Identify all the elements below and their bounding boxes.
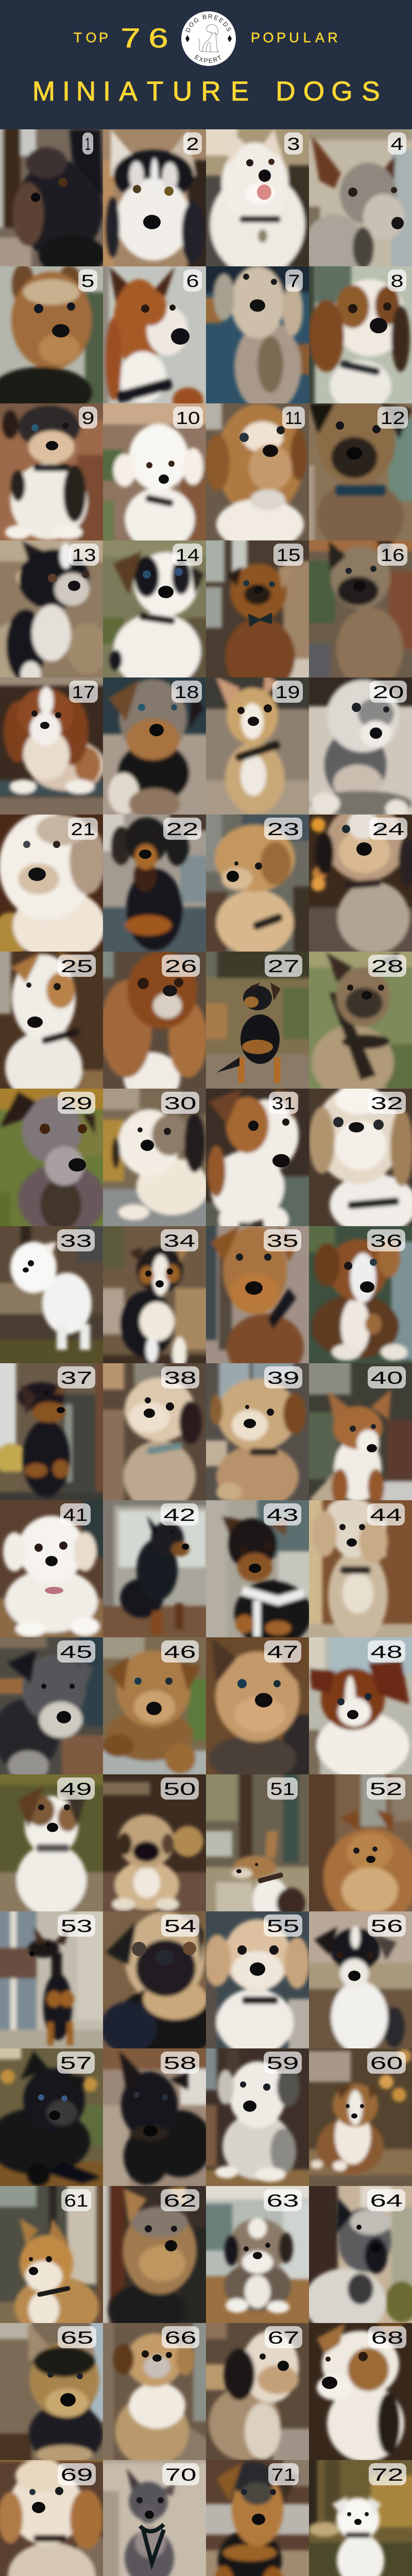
tile 26: long eared spaniel [103,952,206,1089]
badge 59: 59 [267,2054,299,2073]
tile 39: tan puppy window [201,1359,309,1509]
tile 12: border terrier [309,403,412,540]
badge 19: 19 [275,683,300,702]
badge 32: 32 [371,1094,403,1113]
badge 22 [163,818,201,840]
badge 18 [171,681,202,703]
tile 4: hairless terrier [309,129,412,266]
tile 3: white spitz [206,129,309,266]
badge 13: 13 [72,546,96,565]
badge 55: 55 [267,1917,300,1936]
badge 43 [264,1503,301,1526]
badge 48 [368,1640,405,1663]
tile 47: cairn terrier [206,1637,314,1782]
tile 63: shih tzu puppy [201,2181,315,2330]
tile 7: poodle mix [206,266,309,403]
tile 45: mini schnauzer [0,1633,108,1782]
tile 33: white spitz outdoors [0,1226,103,1363]
badge 32 [368,1092,406,1114]
tile 18: yorkie puppy [103,677,206,815]
tile 57: black fluffy pup [0,2044,109,2193]
badge 44 [367,1503,405,1526]
badge 4: 4 [390,134,404,154]
badge 33: 33 [60,1231,92,1251]
logo: dog breeds expert: DOG BREEDS [185,14,231,32]
badge 42: 42 [164,1505,196,1525]
badge 4 [388,132,406,155]
badge 64 [367,2189,405,2211]
tile 71: airedale puppy [201,2455,315,2576]
badge 44: 44 [370,1505,402,1525]
tile 1: black terrier [0,129,103,266]
badge 42 [161,1503,198,1526]
tile 68: jack russell [309,2323,412,2462]
badge 29 [58,1092,95,1114]
tile 31: jack russell [206,1089,309,1226]
heading: top: TOP [74,30,108,45]
badge 33 [57,1229,95,1251]
badge 26: 26 [165,957,197,976]
badge 66 [162,2326,199,2348]
badge 43: 43 [267,1505,299,1525]
badge 2 [183,132,202,155]
badge 29: 29 [61,1094,93,1113]
badge 71: 71 [271,2465,296,2485]
badge 59 [264,2052,302,2074]
tile 72: westie [304,2455,412,2576]
tile 38: cream puppy [98,1359,206,1513]
heading: 76: 76 [121,23,168,54]
badge 54 [161,1914,199,1937]
tile 24: terrier bokeh [309,815,412,952]
badge 56: 56 [371,1917,403,1936]
badge 45 [57,1640,95,1663]
badge 28 [368,955,406,977]
badge 36 [367,1229,405,1251]
badge 37: 37 [61,1368,93,1388]
badge 35: 35 [267,1231,299,1251]
badge 28: 28 [371,957,404,976]
badge 38: 38 [164,1368,197,1388]
badge 20: 20 [373,683,404,702]
badge 6 [183,269,202,292]
badge 65 [58,2326,96,2348]
tile 37: miniature pinscher [0,1359,109,1507]
tile 13: boston terrier [0,540,103,677]
tile 22: dachshund [103,815,206,952]
tile 46: tan puppy [98,1633,212,1782]
badge 9: 9 [81,409,95,428]
tile 41: white maltese [0,1496,109,1645]
tile 29: italian greyhound [0,1089,103,1226]
badge 12: 12 [380,409,405,428]
badge 34: 34 [164,1231,196,1251]
tile 17: cavalier [0,677,103,815]
badge 13 [69,544,99,566]
badge 65: 65 [61,2328,94,2348]
badge 3: 3 [287,134,300,154]
tile 49: jack russell puppy [0,1770,109,1919]
tile 58: scottish terrier [98,2044,212,2193]
badge 60: 60 [370,2054,403,2073]
badge 2: 2 [186,134,199,154]
tile 6: red hound [103,266,206,403]
badge 40 [368,1366,406,1388]
tile 25: fox terrier [0,952,103,1089]
badge 17 [69,681,98,703]
badge 31 [269,1092,298,1114]
badge 14 [173,544,202,566]
badge 52 [367,1777,405,1800]
tile 48: papillon [304,1633,412,1782]
tile 5: terrier [0,266,103,403]
badge 67 [265,2326,302,2348]
badge 1 [82,132,93,155]
badge 25: 25 [61,957,93,976]
tile 14: spotted puppy [103,540,206,677]
badge 20 [370,681,407,703]
badge 39: 39 [267,1368,300,1388]
badge 12 [377,406,408,429]
badge 10: 10 [176,409,200,428]
tile 69: curly poodle [0,2455,109,2576]
tile 34: black white puppy [98,1222,212,1370]
badge 50: 50 [164,1780,196,1799]
tile 51: rat terrier [201,1770,315,1924]
badge 21 [68,818,98,840]
badge 41 [60,1503,91,1526]
tile 53: min pin on sill [0,1907,109,2056]
badge 24: 24 [372,820,405,839]
tile 65: shepherd puppy [0,2318,108,2465]
logo: dog breeds expert [181,11,236,66]
badge 23: 23 [267,820,300,839]
tile 42: miniature pinscher window [98,1496,212,1645]
badge 62 [161,2189,199,2211]
badge 56 [368,1914,406,1937]
badge 54: 54 [164,1917,197,1936]
badge 6: 6 [186,272,199,291]
tile 20: white gray terrier [309,677,412,815]
badge 25 [58,955,96,977]
badge 58: 58 [164,2054,197,2073]
tile 52: pomeranian [304,1770,412,1926]
badge 22: 22 [166,820,199,839]
badge 9 [79,406,97,429]
badge 70: 70 [165,2465,197,2485]
badge 62: 62 [164,2191,197,2211]
tile 9: tricolor puppy [0,403,103,540]
badge 68: 68 [371,2328,404,2348]
tile 59: white grey terrier [201,2044,315,2193]
badge 57 [57,2052,95,2074]
badge 61: 61 [64,2191,89,2211]
badge 31: 31 [272,1094,296,1113]
badge 47 [264,1640,301,1663]
tile 28: french bulldog [309,952,412,1089]
badge 15 [273,544,303,566]
badge 3 [284,132,303,155]
badge 49 [57,1777,95,1800]
badge 50 [161,1777,199,1800]
tile 64: skye terrier [304,2181,412,2335]
badge 66: 66 [165,2328,197,2348]
badge 51 [267,1777,298,1800]
tile 8: beagle [309,266,412,403]
badge 45: 45 [60,1642,93,1662]
badge 39 [264,1366,302,1388]
tile 21: white puppy [0,815,103,952]
tile 55: cream white puppy [201,1911,314,2056]
heading: popular: POPULAR [251,30,338,45]
badge 60 [367,2052,406,2074]
badge 27: 27 [268,957,300,976]
badge 18: 18 [174,683,199,702]
badge 57: 57 [60,2054,92,2073]
badge 70 [162,2463,199,2485]
badge 36: 36 [370,1231,403,1251]
tile 44: toy poodle [304,1496,412,1645]
tile 2: husky [103,129,206,266]
badge 5 [78,269,97,292]
badge 34 [161,1229,198,1251]
badge 11: 11 [285,409,302,428]
tile 66: pekingese mix [98,2318,211,2467]
tile 23: golden puppy [206,815,309,952]
heading: miniature dogs: MINIATURE DOGS [32,76,380,107]
badge 8: 8 [390,272,404,291]
badge 51: 51 [270,1780,295,1799]
tile 40: big eared puppy [304,1359,412,1507]
tile 35: wire terrier [201,1222,309,1381]
tile 36: brown white spaniel [304,1222,412,1364]
badge 67: 67 [268,2328,300,2348]
badge 63 [264,2189,302,2211]
badge 53: 53 [61,1917,93,1936]
tile 27: tiny black puppy [206,952,309,1089]
tile 10: bichon [103,403,206,540]
tile 32: pekingese [309,1089,412,1226]
tile 11: fluffy puppy [206,403,309,540]
badge 14: 14 [175,546,200,565]
badge 16: 16 [380,546,405,565]
tile 60: sheltie pup [304,2048,412,2193]
tile 56: tricolor terrier pup [304,1911,412,2056]
badge 30 [161,1092,199,1114]
tile 50: tibetan spaniel [98,1774,212,1919]
badge 24 [369,818,407,840]
badge 58 [161,2052,199,2074]
badge 7: 7 [288,272,300,291]
title: top 76 popular miniature dogs [32,23,380,107]
badge 46: 46 [164,1642,196,1662]
badge 35 [264,1229,301,1251]
badge 17: 17 [72,683,95,702]
badge 30: 30 [164,1094,197,1113]
badge 55 [264,1914,302,1937]
badge 15: 15 [276,546,301,565]
badge 16 [377,544,407,566]
tile 16: shaggy terrier [309,540,412,677]
badge 27 [265,955,302,977]
badge 48: 48 [371,1642,403,1662]
badge 10 [173,406,203,429]
tile 70: hairless chihuahua [98,2455,212,2576]
tile 54: pug [100,1911,219,2058]
badge 63: 63 [267,2191,299,2211]
badge 53 [58,1914,95,1937]
badge 71 [268,2463,299,2485]
badge 5: 5 [81,272,95,291]
tile 19: chihuahua [206,677,309,815]
badge 19 [272,681,303,703]
badge 7 [285,269,303,292]
tile 67: shaggy cream dog [201,2318,314,2465]
logo: dog breeds expert: EXPERT [195,55,221,63]
badge 69 [58,2463,96,2485]
badge 41: 41 [63,1505,88,1525]
badge 64: 64 [370,2191,403,2211]
badge 1: 1 [85,134,91,154]
tile 15: griffon [206,540,309,677]
badge 38 [161,1366,199,1388]
tile 43: pinscher harness [201,1496,314,1647]
badge 69: 69 [61,2465,93,2485]
badge 23 [264,818,302,840]
badge 46 [161,1640,199,1663]
badge 26 [162,955,200,977]
badge 40: 40 [371,1368,403,1388]
tile 62: yorkshire terrier [98,2181,211,2335]
badge 68 [368,2326,406,2348]
badge 37 [58,1366,95,1388]
badge 47: 47 [267,1642,299,1662]
badge 21: 21 [71,820,95,839]
badge 72: 72 [372,2465,404,2485]
badge 61 [61,2189,91,2211]
badge 49: 49 [60,1780,92,1799]
tile 30: havanese [103,1089,206,1226]
badge 52: 52 [370,1780,403,1799]
badge 72 [369,2463,406,2485]
badge 8 [388,269,406,292]
tile 61: shiba inu [0,2181,108,2338]
